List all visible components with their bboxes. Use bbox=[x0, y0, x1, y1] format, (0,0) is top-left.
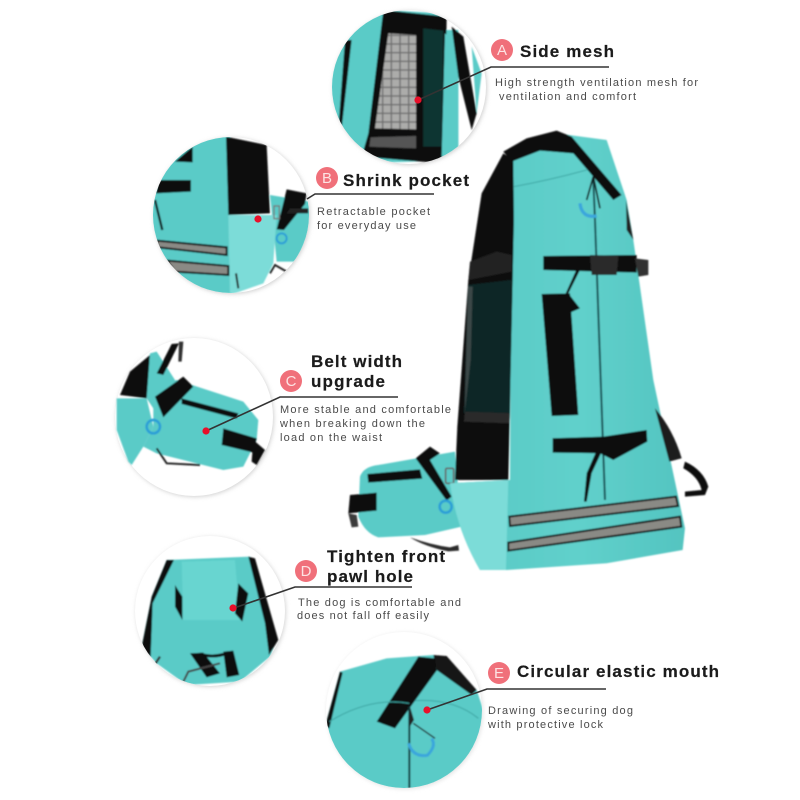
callout E: circular elastic mouth: Drawing of securing dog bbox=[488, 705, 633, 717]
callout D: tighten front pawl hole: does not fall off easily bbox=[297, 610, 430, 622]
circle shadow bbox=[333, 11, 487, 165]
callout C: belt width upgrade: C bbox=[286, 373, 297, 390]
callout B: shrink pocket: Retractable pocket bbox=[317, 206, 430, 218]
callout A: side mesh: Side mesh bbox=[520, 42, 614, 61]
belt pack bbox=[348, 447, 462, 551]
circle shadow bbox=[136, 537, 286, 687]
callout A: side mesh bbox=[414, 39, 698, 104]
callout D: tighten front pawl hole: D bbox=[301, 563, 312, 580]
callout A: side mesh: A bbox=[497, 42, 507, 59]
callout C: belt width upgrade: when breaking down the bbox=[279, 418, 425, 430]
callout B: shrink pocket: Shrink pocket bbox=[343, 171, 469, 190]
callout E: circular elastic mouth: E bbox=[494, 665, 504, 682]
callout B: shrink pocket: for everyday use bbox=[317, 220, 416, 232]
backpack body bbox=[450, 131, 708, 570]
callout E: circular elastic mouth bbox=[423, 662, 719, 731]
circle shadow bbox=[154, 138, 310, 294]
circle shadow bbox=[116, 339, 274, 497]
circle shadow bbox=[327, 633, 483, 789]
callout D: tighten front pawl hole: Tighten front bbox=[327, 547, 445, 566]
callout D: tighten front pawl hole: pawl hole bbox=[327, 567, 413, 586]
callout B: shrink pocket: B bbox=[322, 170, 332, 187]
callout C: belt width upgrade bbox=[202, 352, 451, 444]
callout C: belt width upgrade: load on the waist bbox=[280, 432, 382, 444]
callout D: tighten front pawl hole bbox=[229, 547, 461, 622]
panel: front pawl hole circle bbox=[135, 536, 286, 687]
panel: side mesh circle bbox=[330, 7, 487, 167]
callout E: circular elastic mouth: Circular elastic mouth bbox=[517, 662, 719, 681]
callout C: belt width upgrade: More stable and comfortable bbox=[280, 404, 451, 416]
main backpack photo bbox=[348, 131, 708, 570]
callout A: side mesh: ventilation and comfort bbox=[499, 91, 636, 103]
callout A: side mesh: High strength ventilation mesh for bbox=[495, 77, 698, 89]
callout C: belt width upgrade: Belt width bbox=[311, 352, 402, 371]
callout D: tighten front pawl hole: The dog is comfortable and bbox=[298, 597, 461, 609]
callout E: circular elastic mouth: with protective lock bbox=[487, 719, 604, 731]
callout B: shrink pocket bbox=[254, 167, 469, 232]
panel: shrink pocket circle bbox=[143, 130, 310, 297]
callout C: belt width upgrade: upgrade bbox=[311, 372, 385, 391]
panel: circular elastic mouth circle bbox=[326, 632, 484, 790]
panel: belt width circle bbox=[115, 338, 274, 497]
